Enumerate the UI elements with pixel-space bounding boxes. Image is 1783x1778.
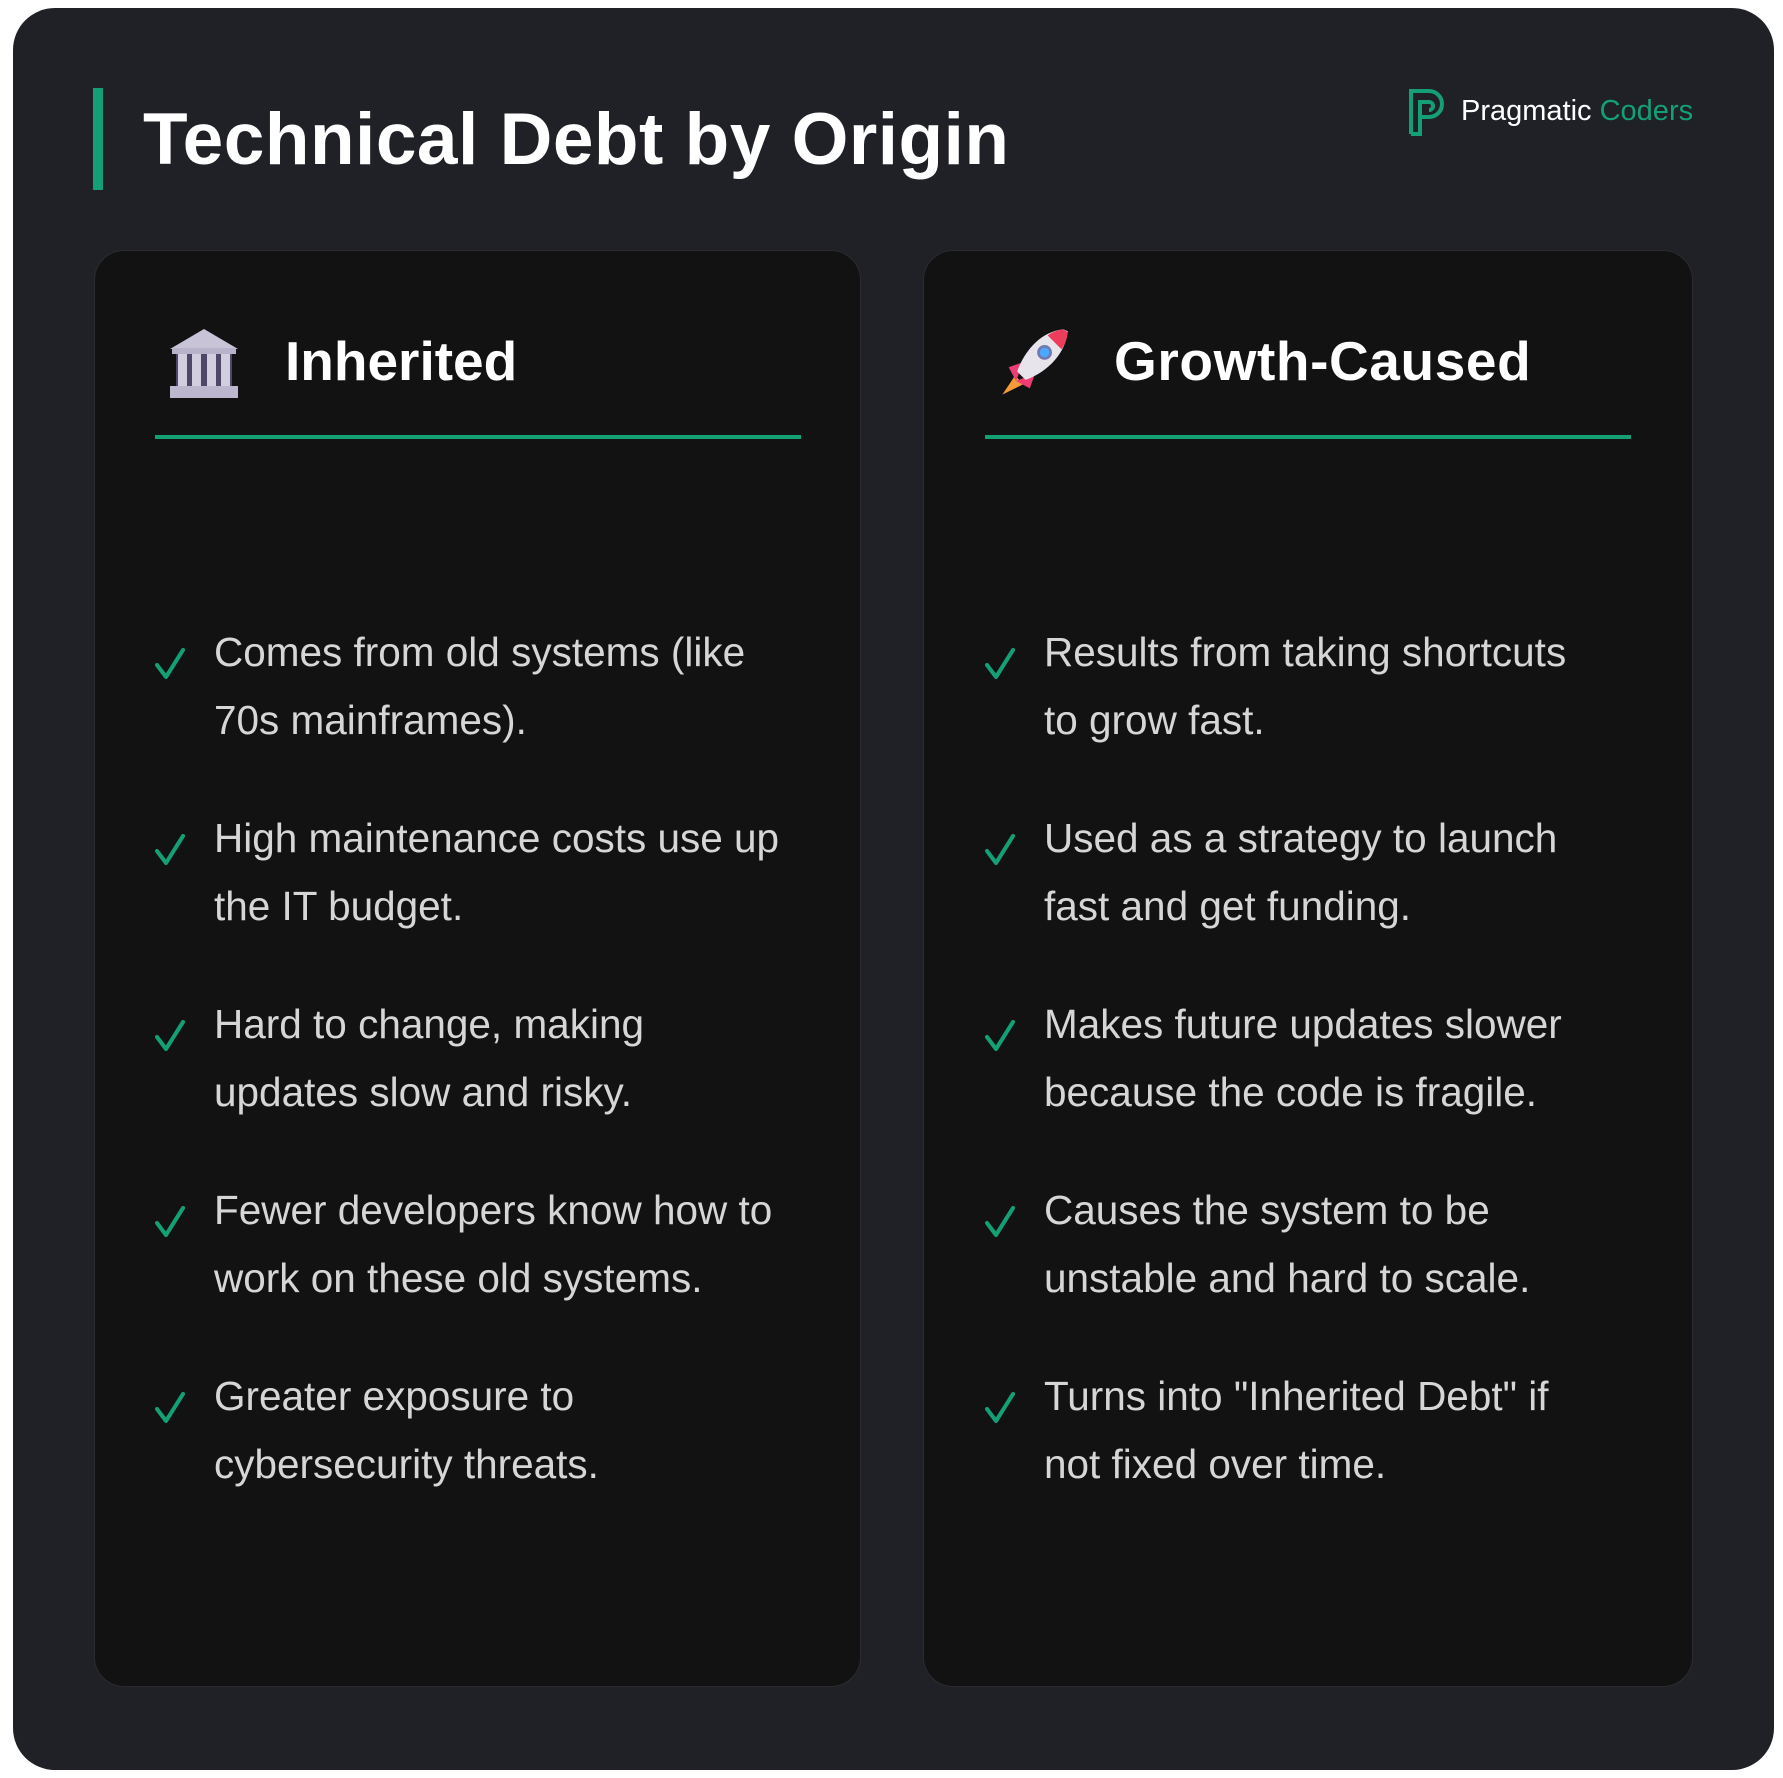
underline (155, 435, 801, 439)
list: inherited: Comes from old systems (like (214, 629, 745, 675)
list: growth-caused: Causes the system to be (1044, 1187, 1490, 1233)
list: growth-caused (985, 629, 1566, 1487)
list: inherited: High maintenance costs use up (214, 815, 779, 861)
list: inherited: updates slow and risky. (214, 1069, 632, 1115)
title accent bar (93, 88, 103, 190)
item 5 (155, 1373, 599, 1487)
underline (985, 435, 1631, 439)
icon: logo P (1409, 89, 1444, 136)
logo text: Pragmatic Coders (1461, 95, 1693, 127)
title: Technical Debt by Origin (143, 99, 1010, 180)
icon: rocket (1002, 329, 1068, 395)
list: growth-caused: Used as a strategy to launch (1044, 815, 1557, 861)
heading: Inherited: Inherited (285, 330, 517, 392)
panel: growth-caused (923, 250, 1693, 1687)
list: growth-caused: Turns into "Inherited Debt" if (1044, 1373, 1548, 1419)
item 4 (985, 1187, 1530, 1301)
list: growth-caused: Makes future updates slower (1044, 1001, 1562, 1047)
heading: Growth-Caused: Growth-Caused (1114, 330, 1531, 392)
list: inherited: cybersecurity threats. (214, 1441, 599, 1487)
list: growth-caused: because the code is fragile. (1044, 1069, 1537, 1115)
list: inherited: Fewer developers know how to (214, 1187, 772, 1233)
list: inherited (155, 629, 779, 1487)
item 2 (985, 815, 1557, 929)
list: inherited: work on these old systems. (214, 1255, 702, 1301)
list: growth-caused: fast and get funding. (1044, 883, 1411, 929)
list: inherited: the IT budget. (214, 883, 463, 929)
icon: bank (170, 329, 238, 398)
item 2 (155, 815, 779, 929)
list: inherited: Greater exposure to (214, 1373, 574, 1419)
logo (1409, 89, 1693, 136)
list: growth-caused: to grow fast. (1044, 697, 1265, 743)
list: growth-caused: Results from taking shortcuts (1044, 629, 1566, 675)
item 1 (155, 629, 745, 743)
list: inherited: 70s mainframes). (214, 697, 527, 743)
item 3 (985, 1001, 1562, 1115)
item 1 (985, 629, 1566, 743)
list: growth-caused: unstable and hard to scale. (1044, 1255, 1530, 1301)
item 5 (985, 1373, 1549, 1487)
item 3 (155, 1001, 644, 1115)
list: inherited: Hard to change, making (214, 1001, 644, 1047)
list: growth-caused: not fixed over time. (1044, 1441, 1386, 1487)
panel: inherited (94, 250, 861, 1687)
item 4 (155, 1187, 772, 1301)
